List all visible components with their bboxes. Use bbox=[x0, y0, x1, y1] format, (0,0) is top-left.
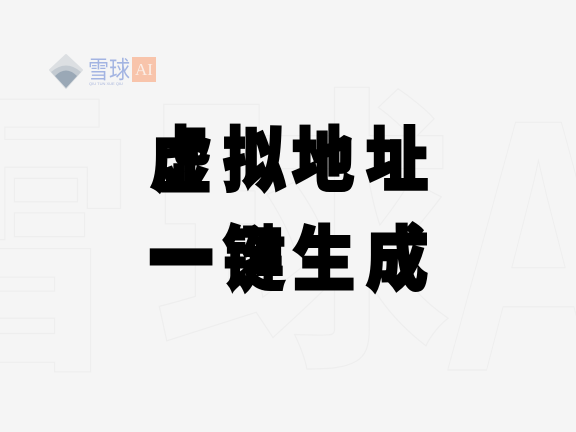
brand name: 雪球 bbox=[88, 52, 130, 86]
title line 1: 拟 bbox=[223, 105, 285, 206]
AI badge: AI bbox=[135, 60, 153, 79]
title line 2: 生 bbox=[293, 204, 355, 305]
title line 1: 虚 bbox=[150, 105, 212, 206]
title line 1 bbox=[150, 105, 428, 206]
background watermark: outlined brand text: 球 bbox=[153, 0, 453, 429]
title line 1: 地 bbox=[292, 105, 354, 206]
title line 2: 键 bbox=[223, 204, 285, 305]
AI badge bbox=[132, 57, 156, 82]
icon: layered diamond bbox=[49, 54, 83, 89]
title line 2 bbox=[150, 204, 428, 305]
title line 1: 址 bbox=[366, 105, 428, 206]
logo bbox=[49, 52, 156, 89]
title line 2: 成 bbox=[366, 204, 428, 305]
title line 2: 一 bbox=[150, 204, 212, 305]
tagline: QIU TUN XUE QIU bbox=[89, 81, 123, 86]
